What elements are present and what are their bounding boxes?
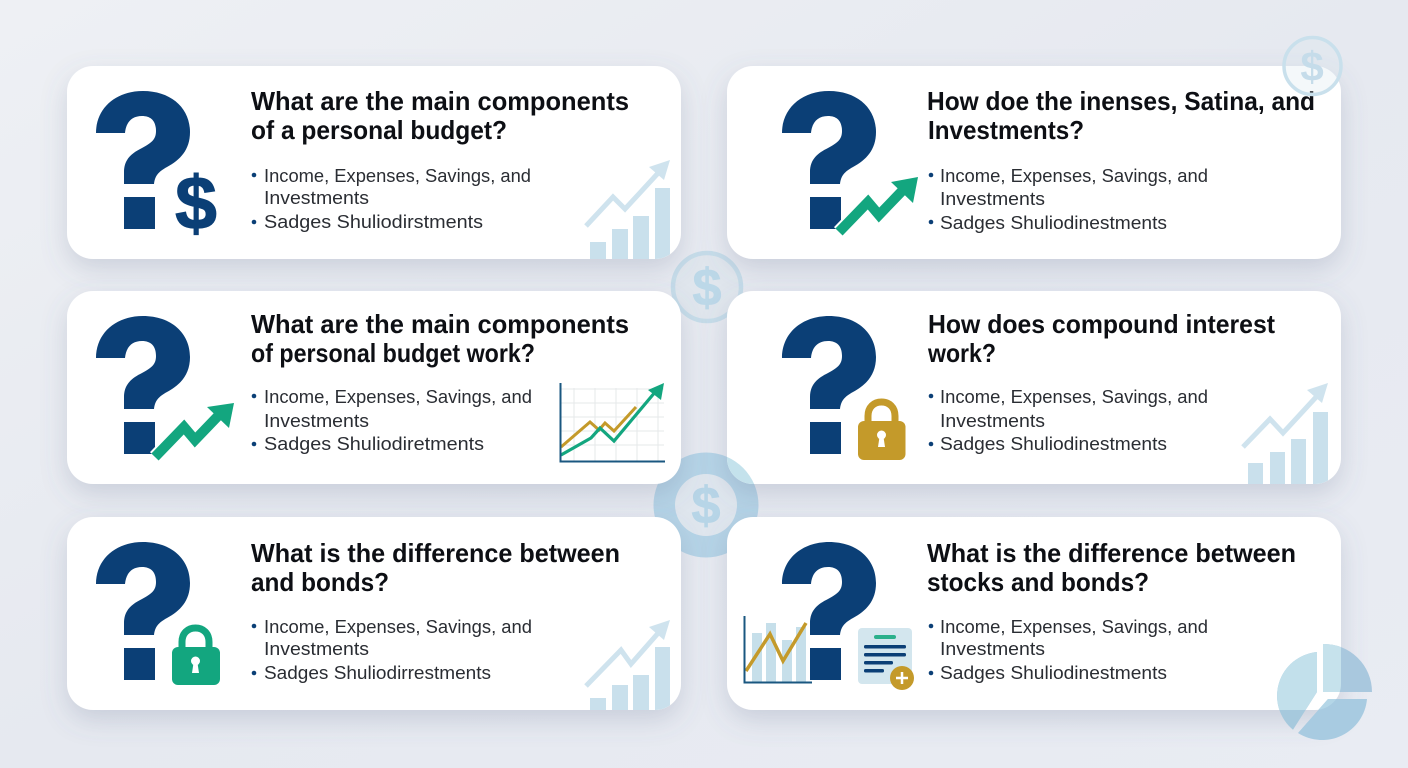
bullet list — [252, 616, 532, 683]
bullet list — [252, 386, 532, 454]
icon: question mark — [782, 91, 876, 229]
bullet list: Income, Expenses, Savings, and — [264, 616, 532, 637]
heading: How does compound interest — [928, 309, 1275, 339]
bullet list: Sadges Shuliodinestments — [940, 662, 1167, 683]
bullet list: Income, Expenses, Savings, and — [264, 165, 531, 186]
heading: What is the difference between — [251, 538, 620, 568]
bullet list: Investments — [264, 410, 369, 431]
icon: growth chart watermark — [1243, 383, 1328, 487]
icon: growth chart watermark — [586, 620, 670, 713]
panel: difference between and bonds — [67, 517, 681, 713]
panel: difference between stocks and bonds — [727, 517, 1341, 710]
bullet list: Sadges Shuliodinestments — [940, 212, 1167, 233]
icon: question mark — [96, 91, 190, 229]
bullet list — [929, 386, 1208, 454]
heading: Investments? — [928, 115, 1084, 145]
heading: stocks and bonds? — [927, 567, 1149, 597]
icon: dollar coin top right: $ — [1300, 43, 1324, 90]
bullet list: Income, Expenses, Savings, and — [264, 386, 532, 407]
line chart — [560, 383, 665, 462]
bullet list: Investments — [940, 188, 1045, 209]
panel: main components of personal budget work — [67, 291, 681, 484]
icon: growth chart watermark — [586, 160, 670, 262]
panel: expenses, savings and investments — [727, 66, 1341, 259]
bullet list — [929, 165, 1208, 233]
heading: of a personal budget? — [251, 115, 507, 145]
heading: and bonds? — [251, 567, 389, 597]
icon: green up arrow — [839, 177, 918, 232]
icon: green up arrow — [155, 403, 234, 457]
bullet list — [252, 165, 531, 232]
bullet list: Sadges Shuliodirstments — [264, 211, 483, 232]
icon: gold padlock — [858, 402, 906, 460]
icon: green padlock — [172, 628, 220, 685]
bullet list: Sadges Shuliodinestments — [940, 433, 1167, 454]
heading: What is the difference between — [927, 538, 1296, 568]
icon: bar and line chart — [744, 616, 812, 682]
icon: question mark — [782, 316, 876, 454]
bullet list: Sadges Shuliodirrestments — [264, 662, 491, 683]
icon: dollar sign: $ — [175, 161, 217, 245]
bullet list: Investments — [264, 187, 369, 208]
bullet list: Investments — [940, 410, 1045, 431]
icon: question mark — [782, 542, 876, 680]
icon: dollar coin behind cards, upper: $ — [693, 259, 722, 317]
panel: personal budget components — [67, 66, 681, 262]
bullet list: Sadges Shuliodiretments — [264, 433, 484, 454]
icon: document with plus — [858, 628, 914, 690]
icon: question mark — [96, 316, 190, 454]
heading: of personal budget work? — [251, 338, 535, 368]
icon: dollar coin top right — [1284, 38, 1341, 94]
heading: work? — [927, 338, 996, 368]
heading: How doe the inenses, Satina, and — [927, 86, 1315, 116]
heading: What are the main components — [251, 86, 629, 116]
bullet list: Investments — [940, 638, 1045, 659]
bullet list: Income, Expenses, Savings, and — [940, 386, 1208, 407]
panel: compound interest — [718, 291, 1350, 503]
bullet list: Investments — [264, 638, 369, 659]
icon: dollar coin behind cards, lower: $ — [692, 477, 721, 535]
icon: dollar coin behind cards, lower — [654, 452, 758, 558]
icon: coin edge tinting card corner — [727, 457, 754, 484]
icon: pie chart watermark — [1277, 644, 1372, 740]
heading: What are the main components — [251, 309, 629, 339]
icon: question mark — [96, 542, 190, 680]
icon: dollar coin behind cards, upper — [673, 253, 741, 321]
bullet list: Income, Expenses, Savings, and — [940, 616, 1208, 637]
bullet list — [929, 616, 1208, 683]
bullet list: Income, Expenses, Savings, and — [940, 165, 1208, 186]
